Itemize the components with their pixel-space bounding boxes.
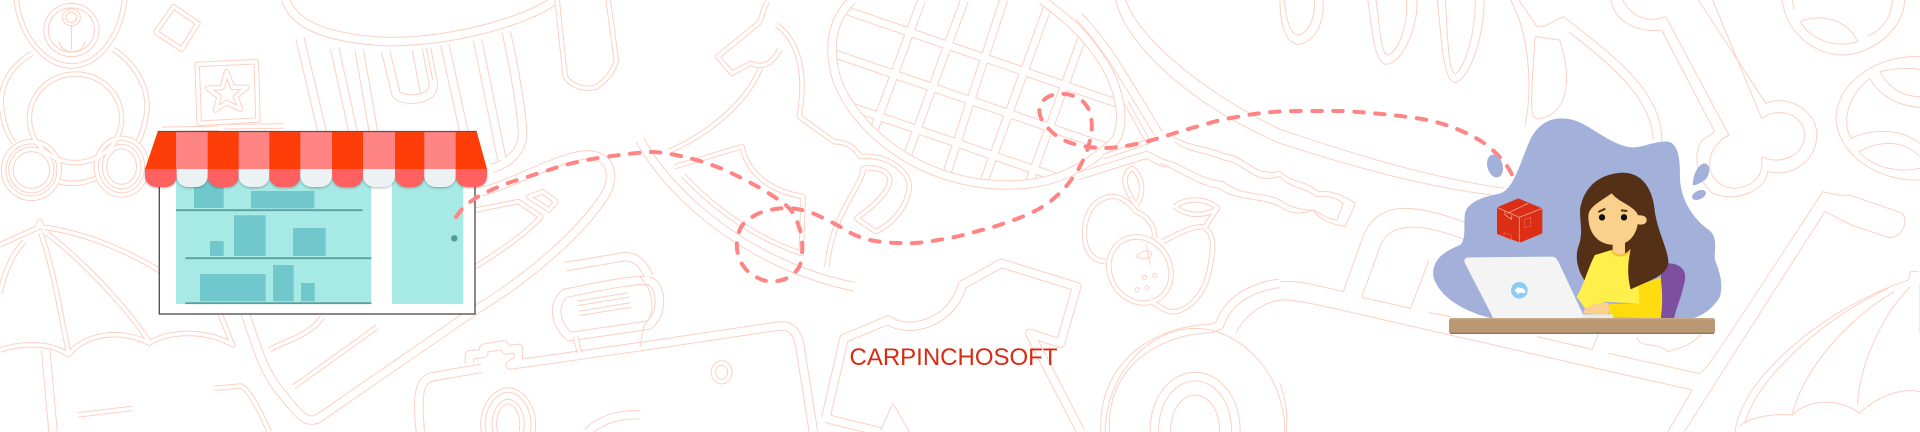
eyebrows <box>1598 209 1627 212</box>
sweater left <box>1577 250 1639 308</box>
woman <box>1577 173 1668 318</box>
sweater right <box>1608 278 1662 318</box>
shelf products <box>194 178 326 301</box>
chair <box>1661 263 1685 318</box>
background blob <box>1433 118 1721 318</box>
store <box>145 132 487 314</box>
ear <box>1637 215 1647 225</box>
door <box>392 170 463 304</box>
awning scallops <box>145 168 487 187</box>
awning stripes <box>176 132 456 169</box>
customer scene <box>1433 118 1721 334</box>
hand <box>1583 303 1609 315</box>
decorative drops <box>1485 153 1709 202</box>
back hair <box>1577 173 1668 289</box>
desk <box>1449 318 1715 334</box>
brand name: CARPINCHOSOFT <box>850 344 1058 371</box>
shop window <box>176 170 371 304</box>
dashed delivery route <box>456 94 1516 281</box>
face <box>1588 193 1638 245</box>
awning canopy <box>145 132 487 169</box>
collar <box>1612 250 1631 255</box>
shelves <box>176 209 371 304</box>
laptop <box>1464 257 1613 319</box>
neck <box>1613 242 1625 255</box>
laptop logo <box>1511 282 1528 299</box>
store frame <box>159 132 475 314</box>
awning <box>145 132 487 187</box>
door knob <box>451 235 457 242</box>
eyes <box>1599 214 1627 220</box>
front hair <box>1628 213 1668 289</box>
parcel box icon <box>1497 198 1542 243</box>
